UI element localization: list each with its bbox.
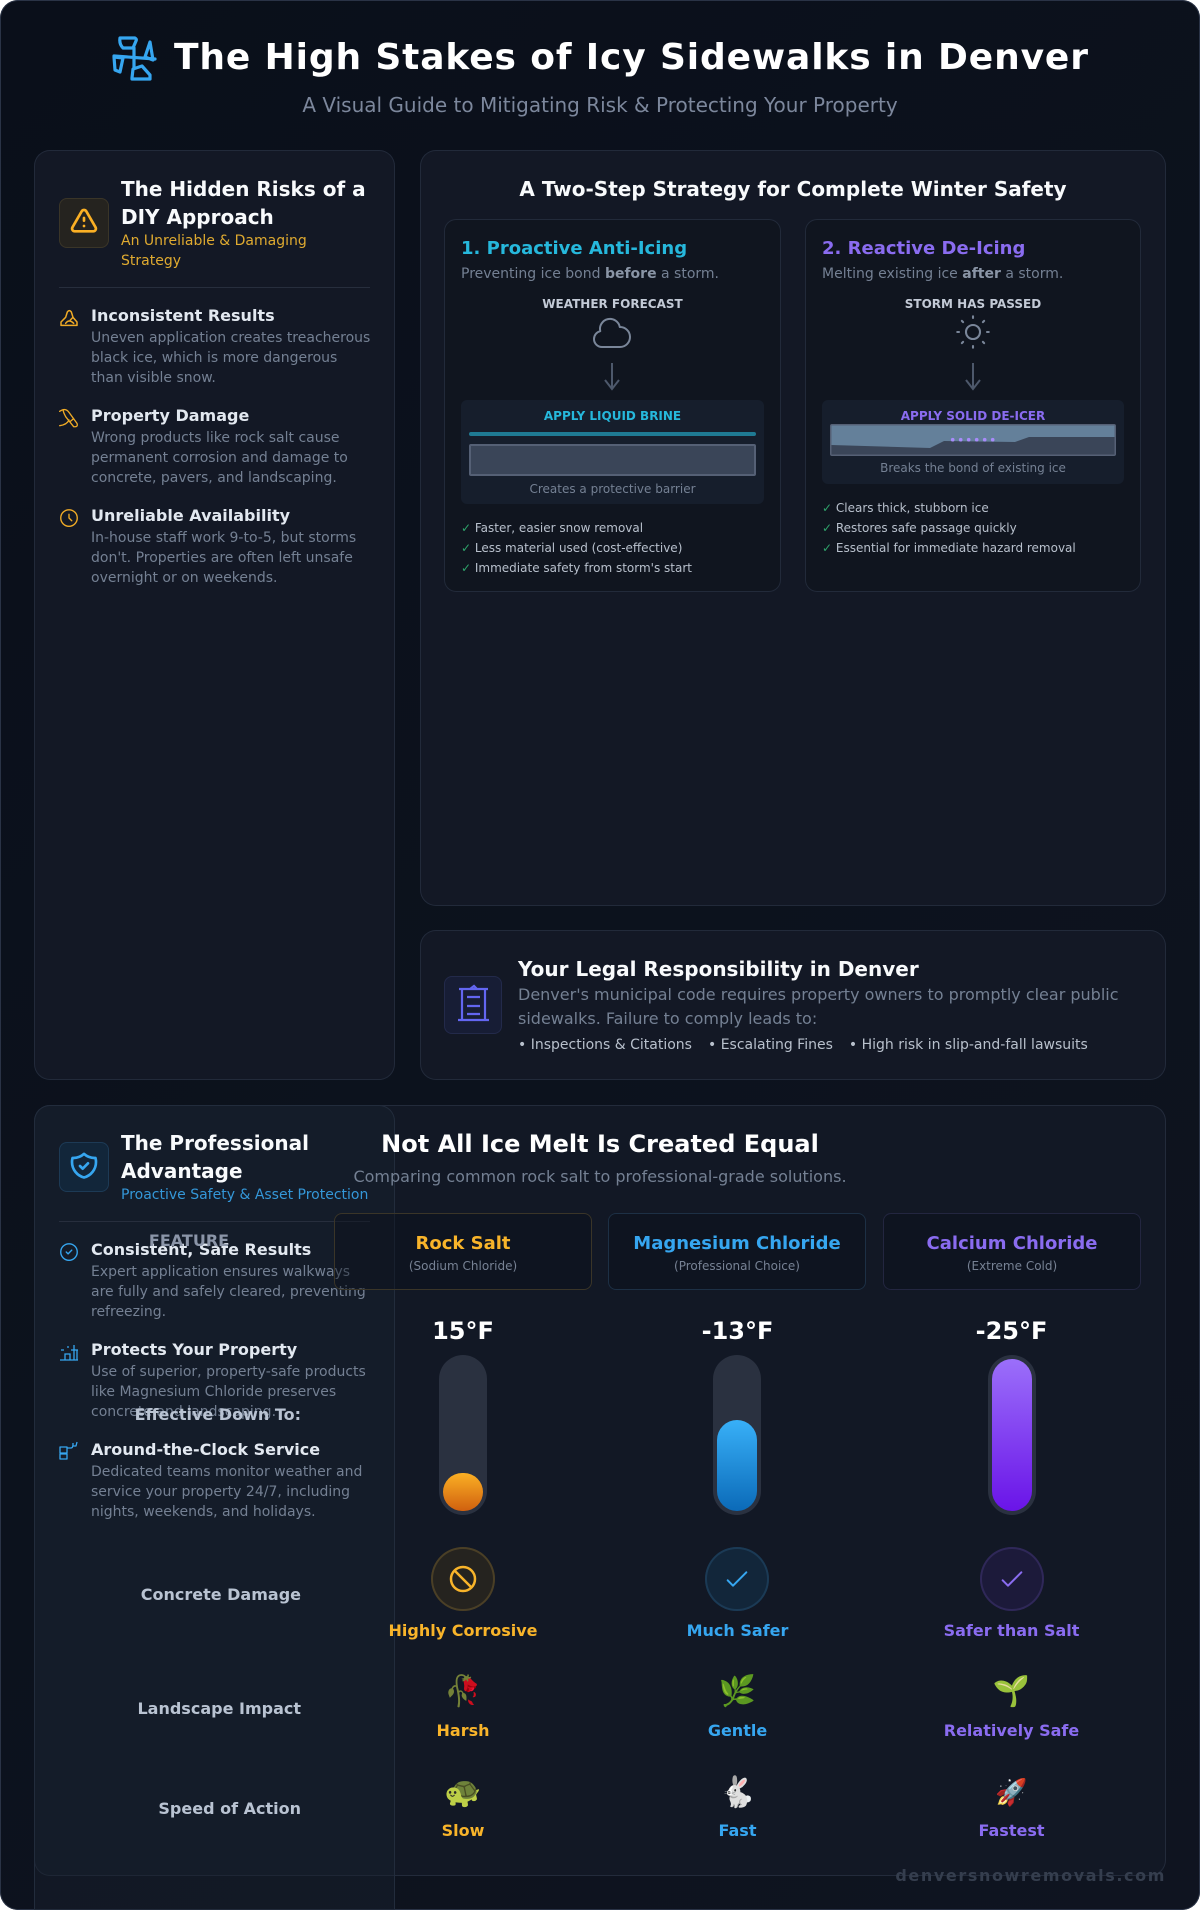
header [112,36,1089,117]
panel: legal responsibility [420,930,1166,1080]
value: slow: Slow [442,1821,484,1840]
column header: rock salt [334,1213,592,1290]
box caption: Creates a protective barrier [529,482,696,496]
box caption: Breaks the bond of existing ice [880,461,1066,475]
risk: property damage: concrete, pavers, and landscaping. [91,470,337,486]
advantage: consistent results: Consistent, Safe Results [91,1240,311,1259]
advantage: protects property: concrete and landscaping. [91,1404,276,1420]
consequences list: • Inspections & Citations • Escalating Fines • High risk in slip-and-fall lawsuits [518,1037,1088,1053]
card description: Melting existing ice after a storm. [822,266,1063,282]
icon: warning triangle [59,198,109,248]
benefits list: ✓ Faster, easier snow removal [461,521,643,535]
heading: hidden risks [121,177,366,229]
subheading: hidden risks: Strategy [121,253,181,269]
risk: unreliable availability: In-house staff work 9-to-5, but storms [91,530,356,546]
icon: document [444,976,502,1034]
panel: two-step strategy [420,150,1166,906]
application box: liquid brine [461,400,764,504]
panel: ice melt comparison content [135,1130,1141,1840]
advantage: around-the-clock: Dedicated teams monitor weather and [91,1464,362,1480]
step label: WEATHER FORECAST [542,297,683,311]
risk: property damage: permanent corrosion and damage to [91,450,348,466]
risk: property damage: Property Damage [91,406,249,425]
risk: inconsistent results: black ice, which is more dangerous [91,350,337,366]
risk: property damage: Wrong products like rock salt cause [91,430,340,446]
column header: calcium chloride [883,1213,1141,1290]
application box: solid de-icer [822,400,1124,484]
heading: professional advantage [121,1131,309,1183]
advantage: consistent results: are fully and safely cleared, preventing [91,1284,366,1300]
risk: inconsistent results: Uneven application creates treacherous [91,330,370,346]
temperature: rock salt: 15°F [432,1317,494,1345]
column header: rock salt: Rock Salt [415,1233,511,1254]
column header: magnesium chloride: (Professional Choice) [674,1259,800,1273]
arrow: down [965,363,981,390]
subheading: professional advantage: Proactive Safety & Asset Protection [121,1187,368,1203]
advantage: consistent results: refreezing. [91,1304,166,1320]
advantage: around-the-clock: nights, weekends, and holidays. [91,1504,316,1520]
row label: landscape impact: Landscape Impact [137,1699,301,1718]
value: relatively safe: Relatively Safe [944,1721,1079,1740]
temperature: magnesium chloride: -13°F [702,1317,773,1345]
risk: inconsistent results: than visible snow. [91,370,216,386]
temperature: calcium chloride: -25°F [976,1317,1047,1345]
icon: check blue [705,1547,769,1611]
pavement [469,444,756,476]
benefits list: ✓ Restores safe passage quickly [822,521,1017,535]
panel: hidden risks of DIY [34,150,395,1080]
risk: unreliable availability: overnight or on weekends. [91,570,278,586]
risk: unreliable availability [60,506,356,586]
subtitle: A Visual Guide to Mitigating Risk & Protecting Your Property [302,93,898,117]
heading: hidden risks: The Hidden Risks of a [121,177,366,201]
icon: turtle: 🐢 [444,1775,482,1810]
benefits list [822,501,1076,555]
advantage: around-the-clock: Around-the-Clock Service [91,1440,320,1459]
column header: rock salt: (Sodium Chloride) [409,1259,517,1273]
value: much safer: Much Safer [687,1621,788,1640]
brine layer [469,432,756,436]
advantage: around-the-clock: service your property 24/7, including [91,1484,350,1500]
card heading: 1. Proactive Anti-Icing [461,238,687,259]
value: fast: Fast [719,1821,756,1840]
heading: legal responsibility: Your Legal Responsibility in Denver [518,957,919,981]
legal description [518,985,1119,1028]
card heading: 2. Reactive De-Icing [822,238,1025,259]
advantage: protects property: Protects Your Property [91,1340,297,1359]
benefits list: ✓ Essential for immediate hazard removal [822,541,1076,555]
value: fastest: Fastest [978,1821,1044,1840]
icon: check purple [980,1547,1044,1611]
ice melt diagram [830,424,1116,456]
risk: unreliable availability: don't. Properties are often left unsafe [91,550,353,566]
icon: seedling: 🌱 [993,1674,1030,1709]
value: highly corrosive: Highly Corrosive [388,1621,538,1640]
benefits list: ✓ Less material used (cost-effective) [461,541,682,555]
thermometer: calcium chloride [988,1355,1036,1515]
risk: unreliable availability: Unreliable Availability [91,506,290,525]
risk: inconsistent results [60,306,370,386]
value: harsh: Harsh [436,1721,490,1740]
icon: corrosive [431,1547,495,1611]
heading: hidden risks: DIY Approach [121,205,274,229]
advantage: around-the-clock [59,1440,362,1520]
icon: title glyph [112,36,157,81]
card: proactive anti-icing [444,219,781,592]
advantage: consistent results [60,1240,366,1320]
legal description: sidewalks. Failure to comply leads to: [518,1009,817,1028]
icon: herb: 🌿 [719,1674,756,1709]
step label: STORM HAS PASSED [905,297,1041,311]
thermometer: rock salt [439,1355,487,1515]
icon: wilted flower: 🥀 [444,1674,482,1709]
benefits list: ✓ Clears thick, stubborn ice [822,501,989,515]
advantage: protects property: Use of superior, property-safe products [91,1364,366,1380]
row label: effective temperature: Effective Down To: [135,1405,301,1424]
risk: property damage [59,406,348,486]
benefits list: ✓ Immediate safety from storm's start [461,561,692,575]
icon: rabbit: 🐇 [719,1775,756,1810]
icon: shield [59,1142,109,1192]
card: reactive de-icing [805,219,1141,592]
comparison subtitle: Comparing common rock salt to professional-grade solutions. [353,1167,847,1186]
value: gentle: Gentle [708,1721,767,1740]
arrow: down [604,363,620,390]
legal description: Denver's municipal code requires property owners to promptly clear public [518,985,1119,1004]
icon: sun [956,315,990,349]
box label: APPLY LIQUID BRINE [544,409,681,423]
column header: magnesium chloride [608,1213,866,1290]
advantage: protects property: like Magnesium Chloride preserves [91,1384,336,1400]
box label: APPLY SOLID DE-ICER [901,409,1045,423]
row label: speed of action: Speed of Action [158,1799,301,1818]
panel background: ice melt comparison [34,1105,1166,1876]
card description: Preventing ice bond before a storm. [461,266,719,282]
thermometer: magnesium chloride [713,1355,761,1515]
column label: feature: FEATURE [149,1231,229,1250]
advantage: protects property [60,1340,366,1420]
icon: rocket: 🚀 [995,1778,1028,1808]
row label: concrete damage: Concrete Damage [141,1585,301,1604]
watermark: denversnowremovals.com [895,1866,1166,1885]
icon: cloud [593,318,631,348]
heading: two-step strategy: A Two-Step Strategy for Complete Winter Safety [519,177,1067,201]
subheading: hidden risks: An Unreliable & Damaging [121,233,307,249]
risk: inconsistent results: Inconsistent Results [91,306,275,325]
panel: professional advantage [34,1105,395,1910]
column header: calcium chloride: (Extreme Cold) [967,1259,1057,1273]
value: safer than salt: Safer than Salt [944,1621,1079,1640]
advantage: consistent results: Expert application ensures walkways [91,1264,350,1280]
heading: professional advantage: The Professional [121,1131,309,1155]
column header: calcium chloride: Calcium Chloride [927,1233,1097,1254]
heading: comparison: Not All Ice Melt Is Created Equal [381,1130,819,1158]
benefits list [461,521,692,575]
title: The High Stakes of Icy Sidewalks in Denver [174,37,1089,78]
column header: magnesium chloride: Magnesium Chloride [633,1233,841,1254]
subheading: hidden risks [121,233,307,269]
heading: professional advantage: Advantage [121,1159,243,1183]
